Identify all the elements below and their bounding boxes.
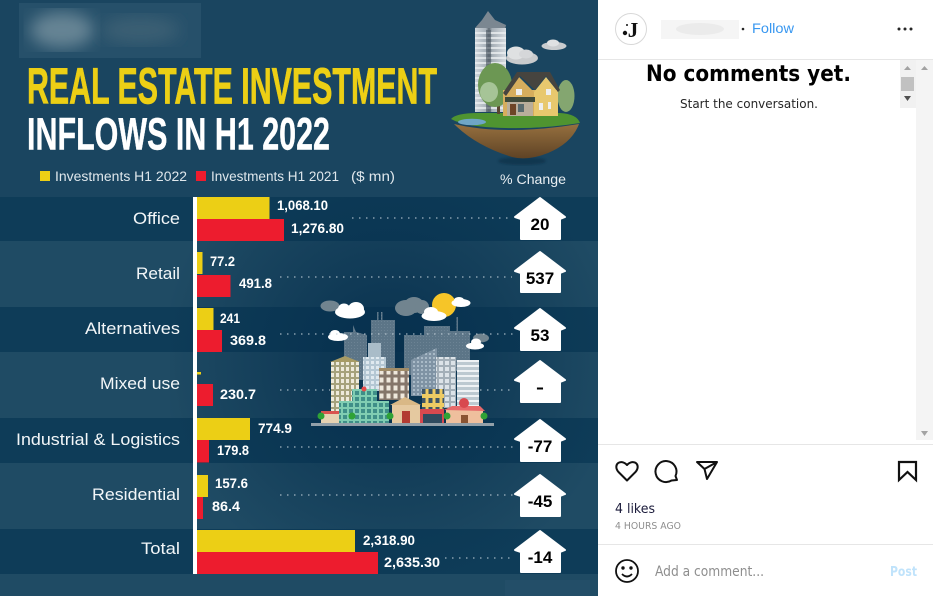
clouds [506,40,566,64]
badge: -14 [515,531,565,572]
row: Total [141,530,440,574]
row: Total: Total [141,539,180,558]
row: Residential: 157.6 [215,476,248,491]
dotted leader lines [280,218,515,558]
white clouds [328,297,484,350]
badge: 53 [515,309,565,350]
% change heading: % Change [500,172,566,187]
badge: dash [515,361,565,402]
likes and time [615,502,681,532]
row: Total: 2,318.90 [363,533,415,548]
legend [40,169,395,184]
badge: -77: -77 [528,437,552,456]
legend: ($ mn) [351,169,395,184]
row: Industrial & Logistics: 179.8 [217,443,249,458]
comment input: Add a comment... [655,564,764,580]
badge: 20 [515,198,565,239]
follow link: Follow [752,20,795,36]
hospital [339,401,389,423]
row: Office: 1,276.80 [291,221,344,236]
likes and time: 4 HOURS AGO [615,521,681,532]
comments empty state: No comments yet. [646,62,851,87]
more menu [898,28,912,30]
bar chart [16,197,440,574]
badge: 537: 537 [526,269,554,288]
blurred username [661,20,739,39]
badge: -77 [515,420,565,461]
scrollbars [900,60,933,440]
badge: -45: -45 [528,492,552,511]
small shop [321,411,339,423]
row: Office [133,197,344,241]
row: Retail [136,252,272,297]
title: INFLOWS IN H1 2022 [27,108,330,160]
badge: 20: 20 [531,215,549,234]
row: Retail: Retail [136,264,180,283]
illustration: floating island with house [451,11,580,165]
comments empty state [646,62,851,111]
sun [432,293,456,317]
icon: share [697,462,717,479]
row: Alternatives: 241 [220,311,240,326]
house [503,72,560,116]
row: Residential: 86.4 [212,499,241,514]
title: REAL ESTATE INVESTMENT [27,58,437,114]
badge: dash: - [536,378,544,397]
comment input [616,560,917,582]
infographic panel [0,0,598,596]
row: Alternatives: Alternatives [85,319,180,338]
row: Retail: 77.2 [210,254,235,269]
row: Mixed use: 230.7 [220,387,256,402]
legend: Investments H1 2022 [55,169,187,184]
row: Residential [92,475,248,519]
badge: -14: -14 [528,548,553,567]
icon: smile [616,560,638,582]
grass [451,113,580,128]
icon: heart [616,462,638,480]
axis [193,197,197,574]
badge: 53: 53 [531,326,549,345]
skyscraper [475,11,506,112]
blurred bottom mark [505,580,590,596]
row: Office: Office [133,209,180,228]
comment input: Post [890,564,917,580]
row: Retail: 491.8 [239,276,272,291]
badge: -45 [515,475,565,516]
avatar: J [628,18,638,42]
illustration: city skyline [311,293,494,426]
row: Residential: Residential [92,485,180,504]
row: Mixed use [100,372,256,406]
post header [616,14,912,44]
social post sidebar [598,0,933,596]
icon: comment [655,461,677,482]
blurred logo [19,3,201,58]
row: Alternatives: 369.8 [230,333,267,348]
pond [458,119,486,125]
legend: Investments H1 2021 [211,169,339,184]
row: Industrial & Logistics [16,418,292,462]
change house badges [515,198,565,572]
school [446,409,483,423]
trees [318,412,488,420]
row: Industrial & Logistics: 774.9 [258,421,292,436]
comments empty state: Start the conversation. [680,96,818,111]
row: Total: 2,635.30 [384,555,440,570]
grey clouds [320,297,489,342]
badge: 537 [515,252,565,292]
ground [311,423,494,426]
trees [478,63,574,114]
background towers [344,312,470,380]
row: Alternatives [85,308,267,352]
front buildings [331,362,359,413]
likes and time: 4 likes [615,502,655,517]
soil [454,124,579,158]
yellow shop [422,389,444,410]
title [27,58,437,160]
action icons [616,461,916,482]
icon: bookmark [899,462,916,480]
row: Office: 1,068.10 [277,198,328,213]
museum [392,405,420,423]
row: Industrial & Logistics: Industrial & Logistics [16,430,180,449]
row: Mixed use: Mixed use [100,374,180,393]
avatar [616,14,646,44]
